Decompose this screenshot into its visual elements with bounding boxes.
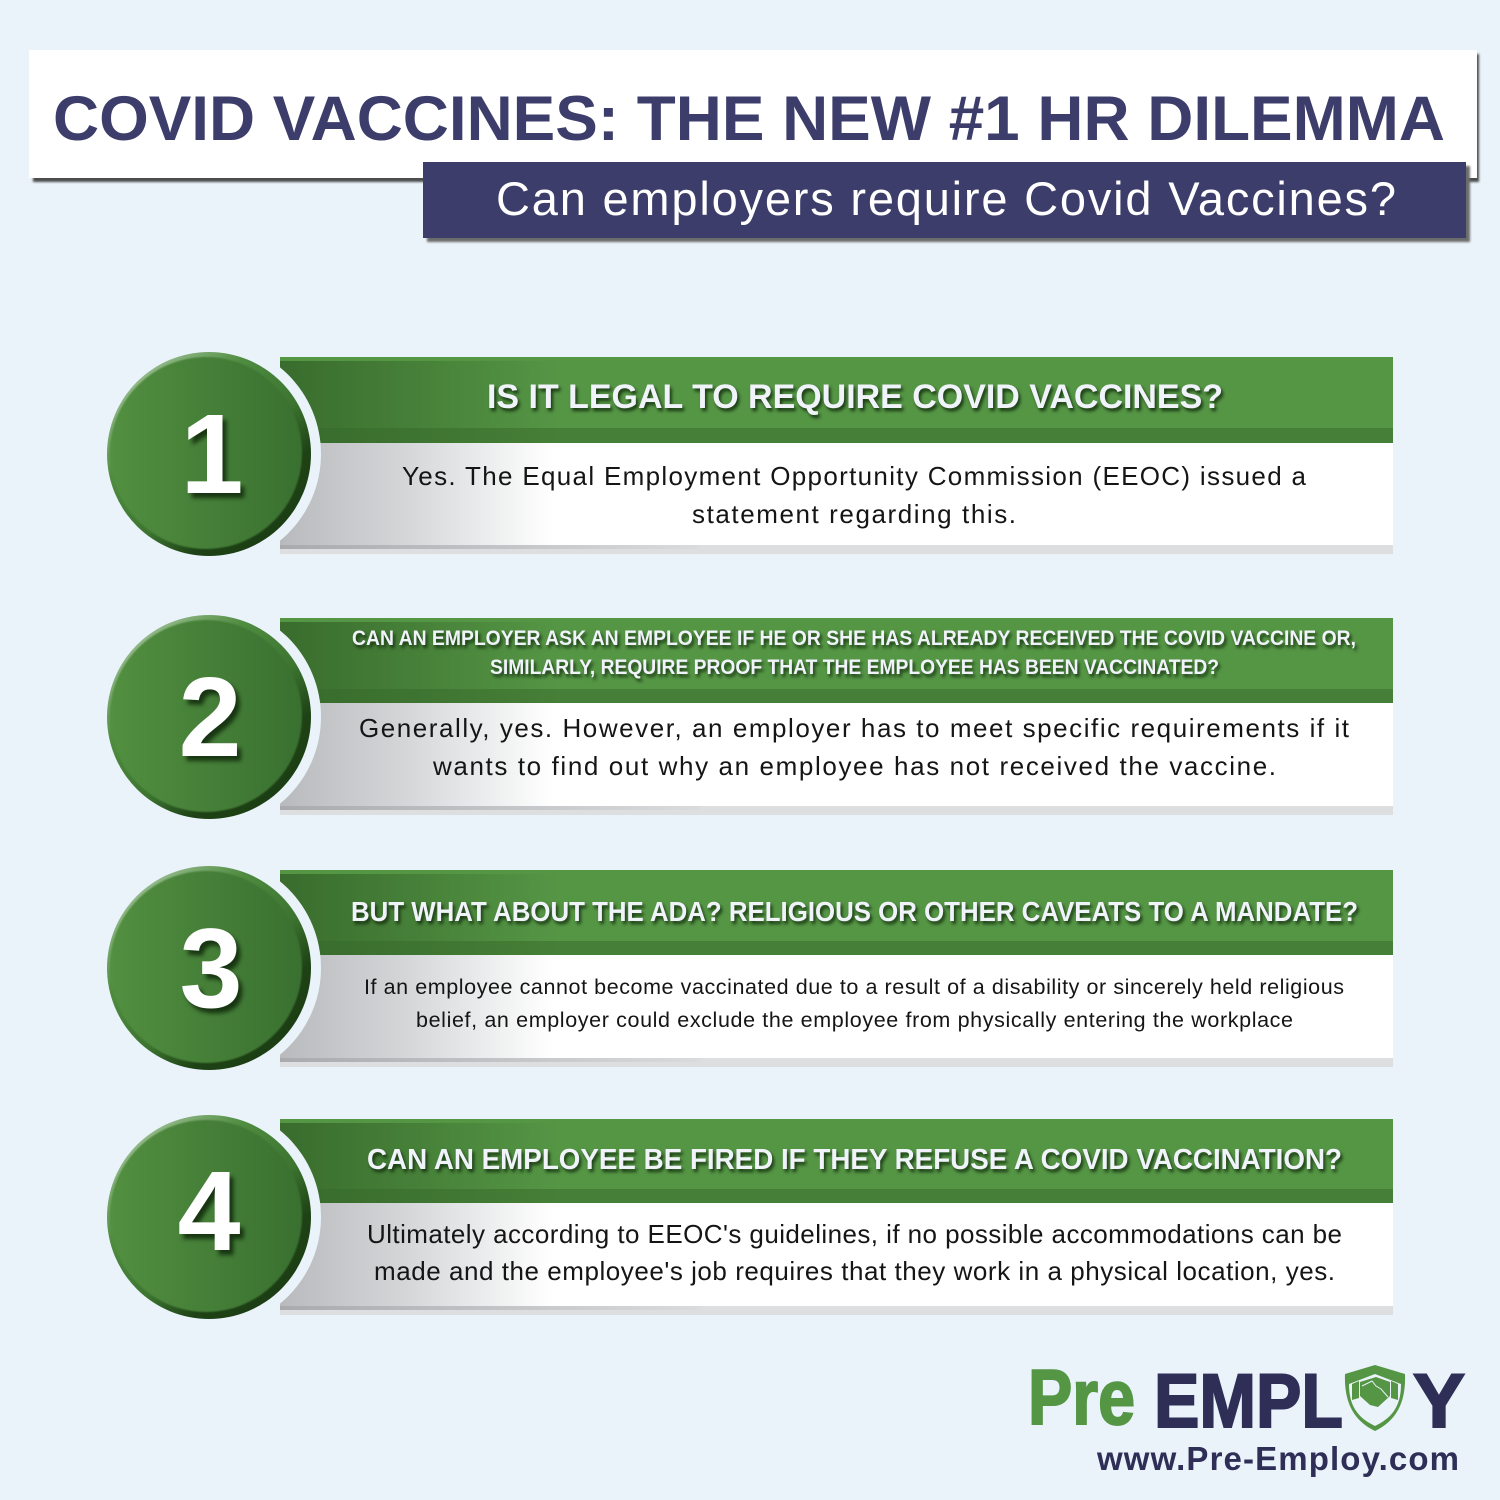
heading 2: CAN AN EMPLOYER ASK AN EMPLOYEE IF HE OR SHE HAS ALREADY RECEIVED THE COVID VACCINE OR, — [352, 627, 1356, 650]
panel: question 3 — [280, 870, 1393, 1067]
logo: Pre Employ — [1028, 1353, 1465, 1477]
answer 1: Yes. The Equal Employment Opportunity Commission (EEOC) issued a — [402, 461, 1307, 491]
number badge 1 — [97, 342, 321, 566]
logo letter Y: Y — [1413, 1359, 1465, 1444]
answer 3: If an employee cannot become vaccinated due to a result of a disability or sincerely held religious — [364, 975, 1344, 999]
heading 4: CAN AN EMPLOYEE BE FIRED IF THEY REFUSE A COVID VACCINATION? — [367, 1144, 1342, 1176]
answer 1: statement regarding this. — [692, 499, 1016, 529]
panel: question 2 — [280, 618, 1393, 815]
answer 3 — [364, 975, 1344, 1032]
answer 3: belief, an employer could exclude the employee from physically entering the workplace — [416, 1008, 1293, 1032]
heading 2: SIMILARLY, REQUIRE PROOF THAT THE EMPLOYEE HAS BEEN VACCINATED? — [490, 656, 1219, 679]
answer 2 — [359, 713, 1350, 781]
logo word Pre: Pre — [1028, 1353, 1135, 1441]
answer 2: wants to find out why an employee has not received the vaccine. — [432, 751, 1276, 781]
number badge 4 — [97, 1105, 321, 1329]
subtitle banner: Can employers require Covid Vaccines? — [496, 172, 1396, 225]
answer 4: Ultimately according to EEOC's guidelines, if no possible accommodations can be — [367, 1219, 1342, 1249]
heading 3: BUT WHAT ABOUT THE ADA? RELIGIOUS OR OTHER CAVEATS TO A MANDATE? — [351, 896, 1358, 927]
subtitle banner — [423, 162, 1470, 242]
website url: www.Pre-Employ.com — [1096, 1440, 1459, 1477]
answer 4: made and the employee's job requires that they work in a physical location, yes. — [374, 1256, 1335, 1286]
heading 1: IS IT LEGAL TO REQUIRE COVID VACCINES? — [487, 378, 1223, 416]
number badge 3: 3 — [180, 905, 242, 1031]
logo word EMPL: EMPL — [1154, 1359, 1343, 1444]
icon: shield with handshake — [1345, 1365, 1405, 1431]
answer 1 — [402, 461, 1307, 529]
title panel — [29, 50, 1479, 182]
panel: question 1 — [280, 357, 1393, 554]
title: COVID VACCINES: THE NEW #1 HR DILEMMA — [53, 84, 1445, 154]
number badge 4: 4 — [178, 1148, 241, 1274]
number badge 2: 2 — [179, 654, 241, 780]
heading 2 — [352, 627, 1356, 679]
answer 2: Generally, yes. However, an employer has to meet specific requirements if it — [359, 713, 1350, 743]
number badge 3 — [97, 856, 321, 1080]
panel: question 4 — [280, 1119, 1393, 1315]
answer 4 — [367, 1219, 1342, 1286]
number badge 2 — [97, 605, 321, 829]
number badge 1: 1 — [181, 391, 243, 517]
